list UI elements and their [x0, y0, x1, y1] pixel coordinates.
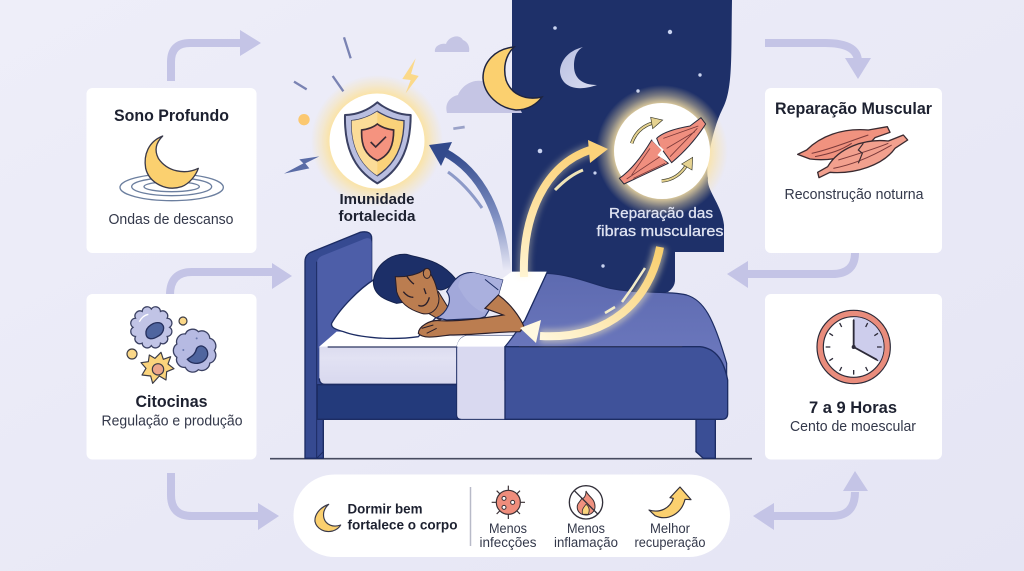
panel: night sky	[512, 0, 732, 292]
panel: 7 a 9 horas	[765, 294, 942, 460]
text: menos inflamacao	[554, 521, 618, 550]
icon: virus	[492, 486, 525, 519]
icon: small crescent	[315, 504, 341, 532]
face details	[403, 276, 429, 306]
text: main message: Dormir bem	[348, 502, 422, 516]
floor line	[270, 456, 752, 461]
mattress	[319, 332, 463, 384]
back leg	[696, 419, 715, 458]
icon: immune cells	[127, 307, 216, 383]
face	[395, 269, 439, 314]
text: menos infeccoes: infecções	[480, 535, 537, 550]
panel: citocinas	[86, 294, 256, 460]
heading: Sono Profundo	[114, 107, 229, 125]
arm	[418, 295, 524, 337]
caption: Cento de moescular	[790, 419, 916, 435]
icon: recovery arrow	[649, 487, 691, 518]
panel: bottom summary pill	[294, 474, 730, 557]
icon: no fire	[569, 486, 603, 519]
text: menos inflamacao: inflamação	[554, 535, 618, 550]
text: melhor recuperacao: Melhor	[650, 521, 690, 536]
arrow: yellow descending to bed	[520, 247, 660, 343]
icon: muscle repair with glow	[596, 85, 728, 217]
caption: Ondas de descanso	[108, 212, 234, 228]
text: reparacao das fibras musculares: fibras musculares	[596, 223, 724, 240]
icon: clock	[817, 310, 890, 384]
stars	[538, 26, 702, 268]
text: menos inflamacao: Menos	[567, 521, 605, 536]
text: melhor recuperacao	[634, 521, 706, 550]
arrow: yellow rising to muscle	[524, 140, 608, 277]
text: menos infeccoes: Menos	[489, 521, 527, 536]
icon: immunity shield with glow	[311, 75, 443, 207]
icon: yellow crescent moon	[483, 47, 542, 110]
shirt	[437, 273, 503, 320]
icon: muscle fibers	[798, 127, 908, 178]
text: main message: fortalece o corpo	[348, 518, 458, 532]
arrow: top left flow	[171, 30, 261, 81]
icon: large cloud	[446, 81, 522, 113]
arrow: bottom right flow	[753, 471, 868, 530]
white sheet edge	[525, 273, 547, 320]
text: imunidade fortalecida	[338, 191, 416, 225]
heading: Reparação Muscular	[775, 100, 933, 118]
sheet fold	[457, 336, 517, 419]
neck	[428, 292, 452, 320]
illustration: bed with sleeping person	[270, 232, 752, 459]
icon: small cloud	[435, 36, 469, 52]
white sheet behind shoulder	[498, 272, 547, 323]
hair	[373, 254, 456, 303]
caption: Reconstrução noturna	[784, 187, 924, 203]
icon: pale moon	[560, 47, 597, 88]
heading: Citocinas	[136, 393, 208, 411]
icon: decorative rays and bolts	[284, 37, 465, 174]
text: imunidade fortalecida: fortalecida	[338, 208, 416, 225]
text: reparacao das fibras musculares	[596, 205, 724, 240]
arrow: middle right flow	[727, 253, 855, 288]
ear	[423, 268, 431, 278]
text: menos infeccoes	[480, 521, 537, 550]
text: reparacao das fibras musculares: Reparação das	[609, 205, 713, 222]
arrow: bottom left flow	[171, 473, 279, 530]
frame rail	[317, 385, 460, 419]
headboard	[305, 232, 372, 458]
text: melhor recuperacao: recuperação	[634, 535, 706, 550]
text: main message	[348, 502, 458, 532]
blanket	[505, 273, 727, 380]
panel: reparacao muscular	[765, 88, 942, 253]
heading: 7 a 9 Horas	[809, 399, 897, 417]
arrow: blue rising to immunity	[429, 142, 507, 270]
panel: sono profundo	[86, 88, 256, 253]
arrow: middle left flow	[170, 263, 292, 295]
arrow: top right flow	[765, 43, 871, 79]
pillow	[332, 280, 437, 338]
caption: Regulação e produção	[102, 414, 242, 430]
text: imunidade fortalecida: Imunidade	[340, 191, 414, 208]
icon: moon on water	[120, 136, 223, 201]
